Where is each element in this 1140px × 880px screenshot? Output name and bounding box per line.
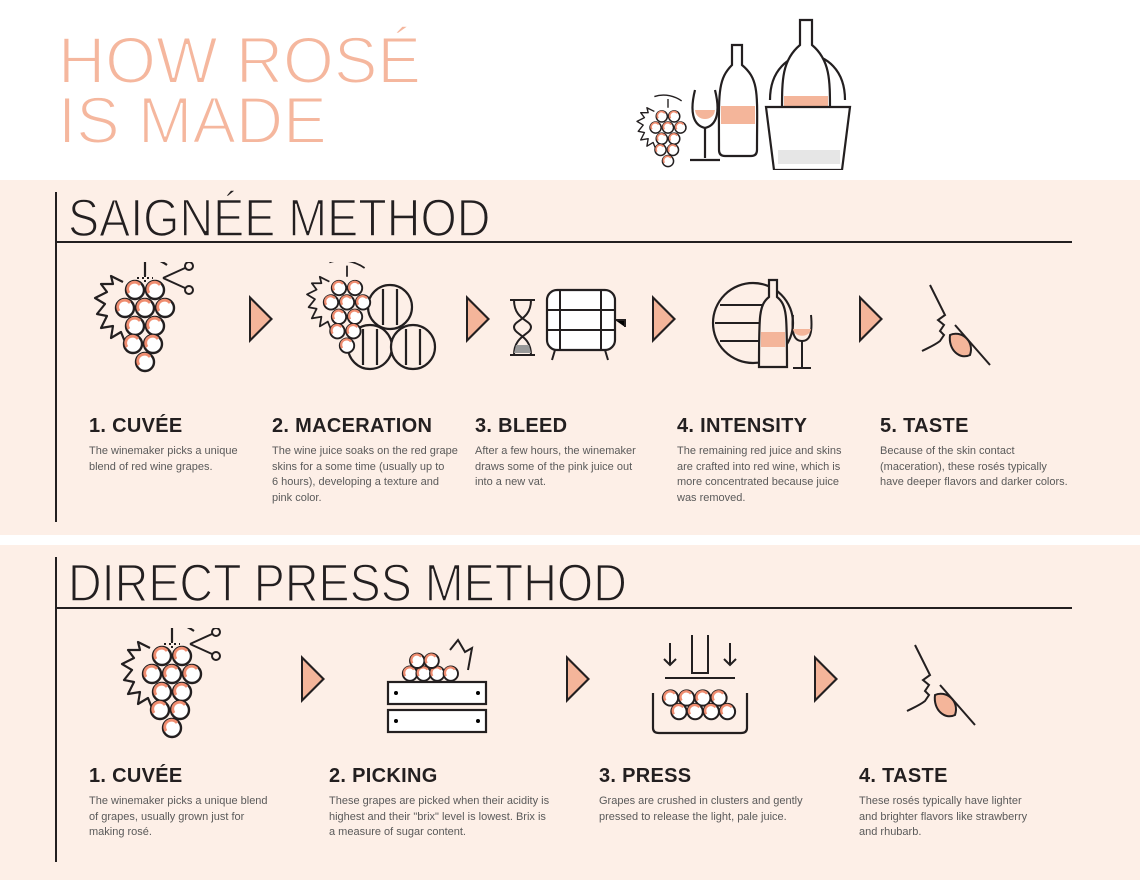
step 1 xyxy=(89,764,268,838)
step 3: 3. PRESS xyxy=(599,765,691,787)
arrow 2 xyxy=(566,655,590,703)
step 4: was removed. xyxy=(677,492,745,504)
step 4: and rhubarb. xyxy=(859,826,921,838)
step 5 xyxy=(880,415,1068,488)
step 1: of grapes, usually grown just for xyxy=(89,810,244,822)
step 2 xyxy=(329,765,549,838)
arrow 3 xyxy=(652,295,676,343)
step 2 xyxy=(272,415,458,504)
step 4: 4. TASTE xyxy=(859,765,948,787)
icon: hero wine illustration xyxy=(636,18,852,170)
step 1: The winemaker picks a unique xyxy=(89,445,238,457)
step 5: (maceration), these rosés typically xyxy=(880,460,1047,472)
step 2: pink color. xyxy=(272,492,322,504)
step 3 xyxy=(599,765,803,822)
step 2: 6 hours), developing a texture and xyxy=(272,476,439,488)
title: IS MADE xyxy=(58,83,327,157)
step 2: skins for a some time (usually up to xyxy=(272,460,444,472)
step 1: making rosé. xyxy=(89,826,152,838)
step 3: After a few hours, the winemaker xyxy=(475,445,636,457)
step 3: 3. BLEED xyxy=(475,415,567,437)
arrow 2 xyxy=(466,295,490,343)
icon: picking crate xyxy=(386,638,488,734)
step 3: into a new vat. xyxy=(475,476,546,488)
title xyxy=(58,23,421,157)
icon: taste xyxy=(922,284,991,366)
step 4: These rosés typically have lighter xyxy=(859,795,1022,807)
step 1: 1. CUVÉE xyxy=(89,415,183,437)
step 1: blend of red wine grapes. xyxy=(89,460,213,472)
step 4: are crafted into red wine, which is xyxy=(677,460,840,472)
arrow 1 xyxy=(249,295,273,343)
step 1: 1. CUVÉE xyxy=(89,765,183,787)
step 4: 4. INTENSITY xyxy=(677,415,807,437)
step 5: have deeper flavors and darker colors. xyxy=(880,476,1068,488)
step 4: and brighter flavors like strawberry xyxy=(859,810,1027,822)
arrow 4 xyxy=(859,295,883,343)
icon: taste xyxy=(906,644,976,726)
icon: hourglass and barrel xyxy=(510,288,626,360)
step 2: a measure of sugar content. xyxy=(329,826,466,838)
step 1 xyxy=(89,414,238,472)
icon: intensity barrel bottle glass xyxy=(712,278,812,369)
step 3: Grapes are crushed in clusters and gently xyxy=(599,795,803,807)
step 2: The wine juice soaks on the red grape xyxy=(272,445,458,457)
step 2: These grapes are picked when their acidity is xyxy=(329,795,549,807)
icon: maceration xyxy=(306,262,436,370)
step 1: The winemaker picks a unique blend xyxy=(89,795,268,807)
arrow 1 xyxy=(301,655,325,703)
panel: direct press method xyxy=(0,545,1140,880)
step 2: 2. PICKING xyxy=(329,765,438,787)
step 3: draws some of the pink juice out xyxy=(475,460,632,472)
step 4: The remaining red juice and skins xyxy=(677,445,841,457)
icon: press xyxy=(652,635,748,734)
arrow 3 xyxy=(814,655,838,703)
heading: saignée: SAIGNÉE METHOD xyxy=(68,189,490,248)
step 4 xyxy=(677,415,842,504)
title: HOW ROSÉ xyxy=(58,23,421,97)
step 3 xyxy=(475,415,636,488)
step 2: 2. MACERATION xyxy=(272,415,432,437)
step 4 xyxy=(859,765,1028,838)
step 4: more concentrated because juice xyxy=(677,476,839,488)
step 2: highest and their "brix" level is lowest. Brix is xyxy=(329,810,546,822)
step 3: pressed to release the light, pale juice. xyxy=(599,810,787,822)
icon: cuvée grapes xyxy=(94,262,194,372)
heading: direct press: DIRECT PRESS METHOD xyxy=(68,554,627,613)
step 5: 5. TASTE xyxy=(880,415,969,437)
panel: saignée method xyxy=(0,180,1140,535)
step 5: Because of the skin contact xyxy=(880,445,1015,457)
icon: cuvée grapes xyxy=(120,628,221,738)
